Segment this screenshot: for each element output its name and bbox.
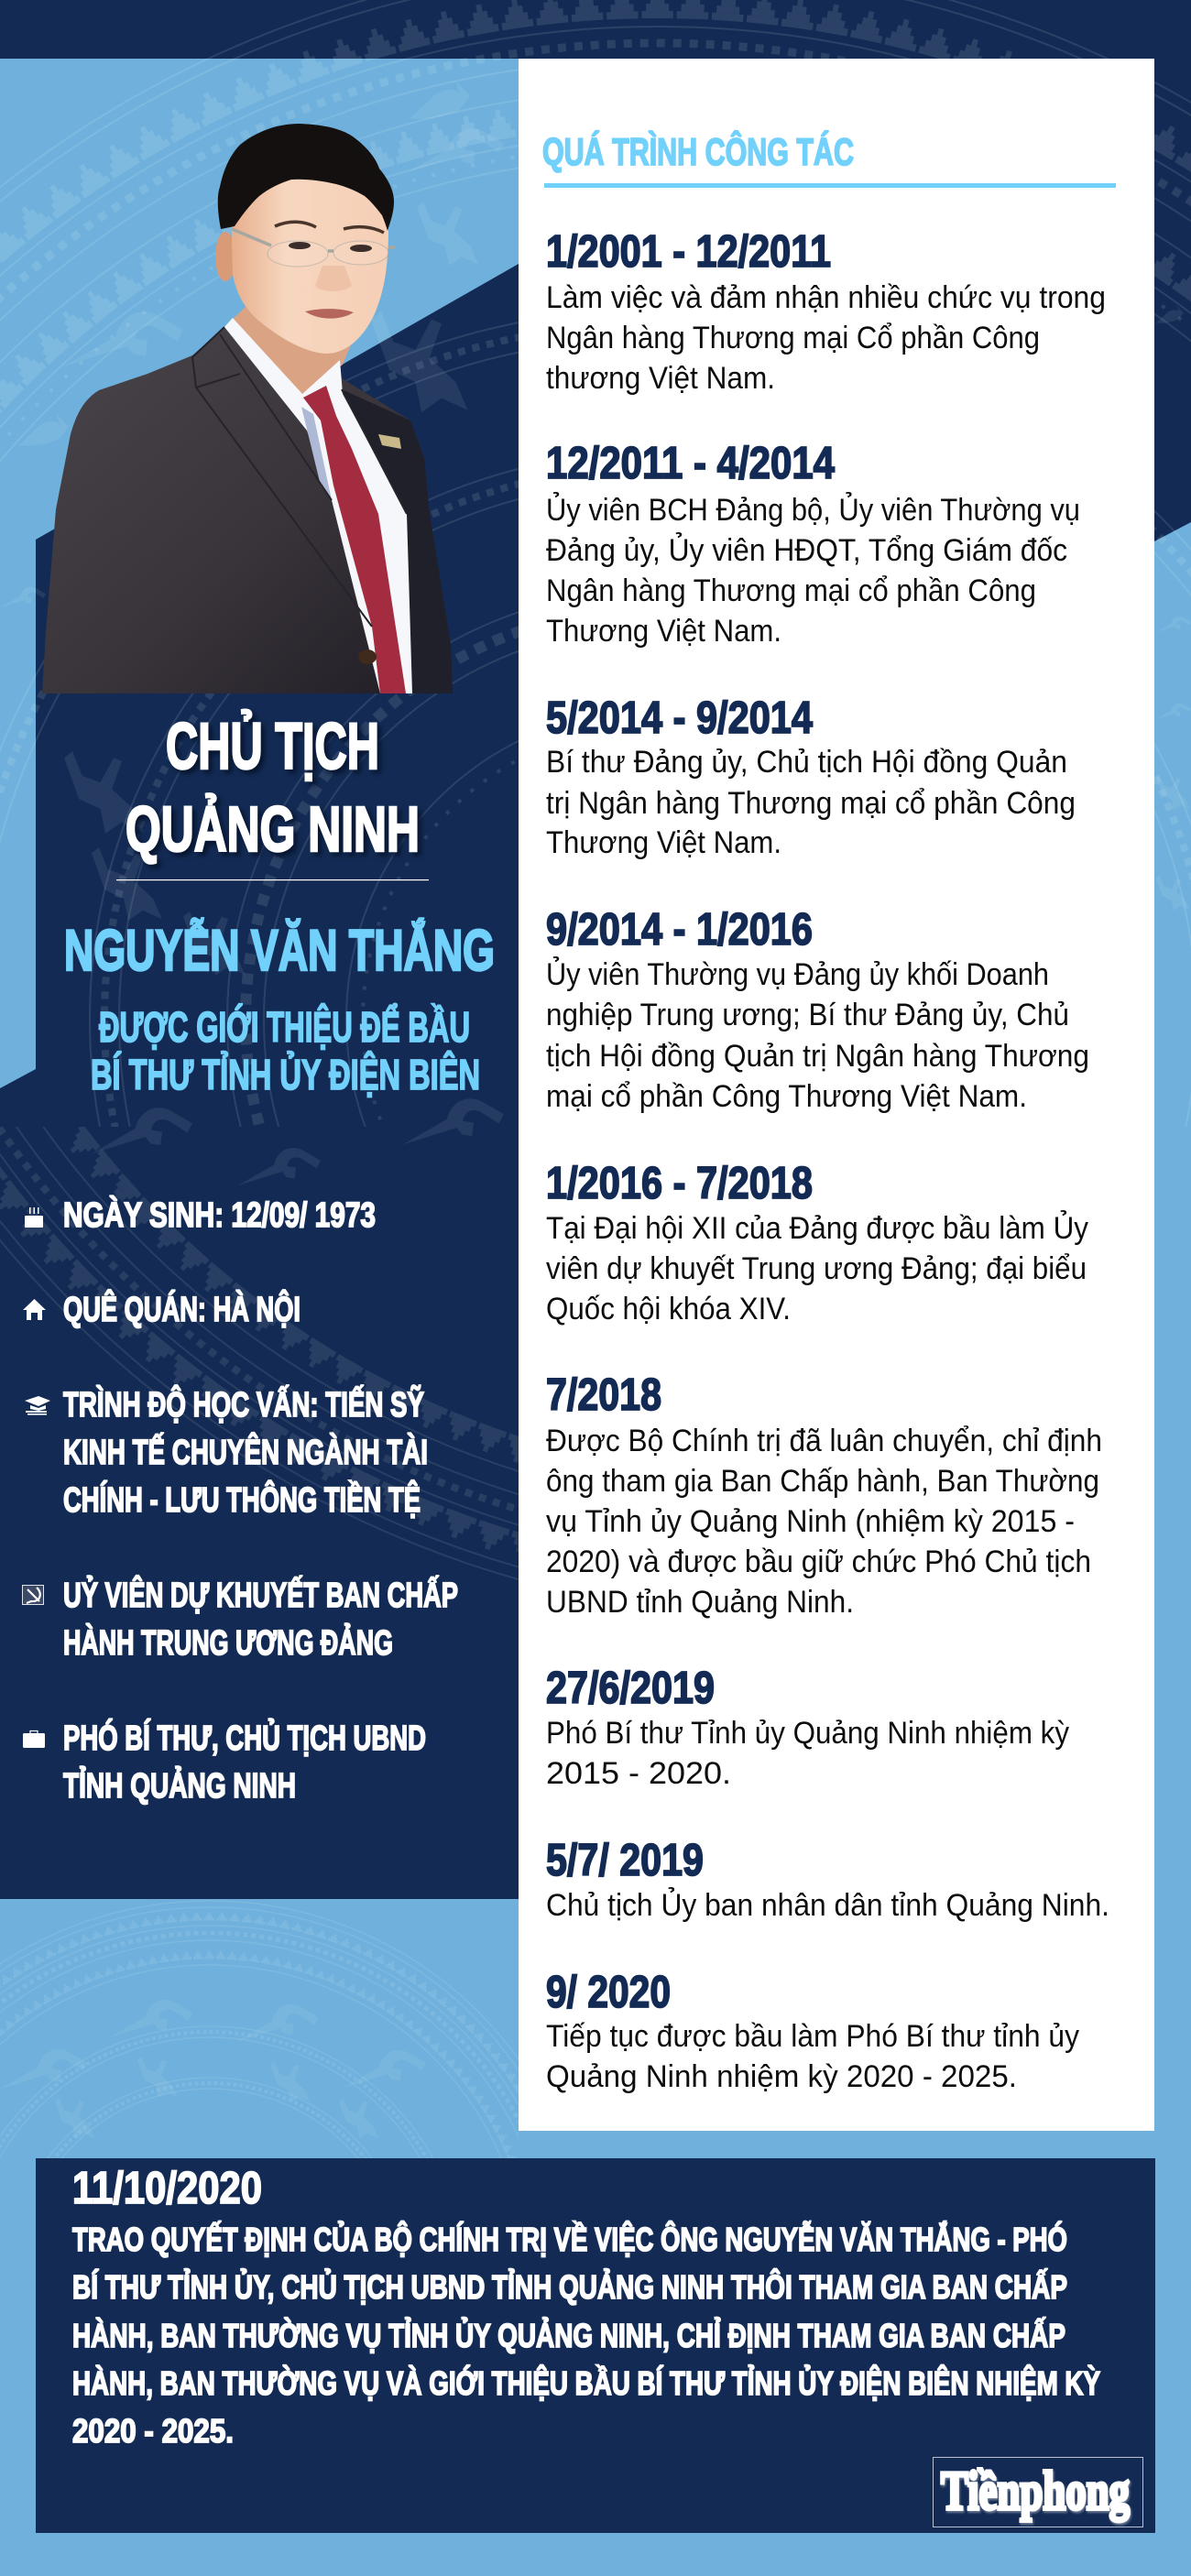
- name: NGUYỄN VĂN THẮNG: [64, 918, 495, 983]
- bottom panel: decision of 11/10/2020: 2020 - 2025.: [72, 2412, 234, 2450]
- career entry 5: viên dự khuyết Trung ương Đảng; đại biểu: [546, 1251, 1087, 1286]
- career entry 8: [546, 1836, 1109, 1923]
- drum pattern: light area bottom left: [0, 1900, 519, 2158]
- drum pattern: figures upper: [0, 81, 1191, 1185]
- career entry 9: 9/ 2020: [546, 1968, 671, 2017]
- career entry 1: [546, 227, 1106, 396]
- career entry 4: mại cổ phần Công Thương Việt Nam.: [546, 1079, 1027, 1114]
- career entry 2: [546, 439, 1080, 649]
- fact: education: KINH TẾ CHUYÊN NGÀNH TÀI: [63, 1432, 428, 1472]
- face: [231, 174, 388, 354]
- title block: QUẢNG NINH: [126, 793, 420, 865]
- fact: education: CHÍNH - LƯU THÔNG TIỀN TỆ: [63, 1479, 421, 1520]
- fact: birth date: [25, 1195, 376, 1235]
- career entry 3: Thương Việt Nam.: [546, 825, 781, 860]
- career entry 9: Tiếp tục được bầu làm Phó Bí thư tỉnh ủy: [546, 2019, 1079, 2054]
- title block: [126, 710, 420, 865]
- icon: briefcase: [23, 1731, 45, 1748]
- glasses: [232, 229, 395, 267]
- panel heading: career history: [542, 129, 1116, 188]
- career entry 4: 9/2014 - 1/2016: [546, 905, 813, 955]
- career entry 2: Đảng ủy, Ủy viên HĐQT, Tổng Giám đốc: [546, 533, 1067, 568]
- career entry 1: 1/2001 - 12/2011: [546, 227, 831, 277]
- career entry 7: [546, 1664, 1069, 1791]
- career entry 4: Ủy viên Thường vụ Đảng ủy khối Doanh: [546, 957, 1049, 992]
- career entry 3: 5/2014 - 9/2014: [546, 693, 813, 743]
- fact: party membership: HÀNH TRUNG ƯƠNG ĐẢNG: [63, 1622, 393, 1663]
- jacket right dark side: [342, 389, 453, 693]
- logo: Tiền phong: [933, 2457, 1143, 2527]
- icon: cake: [25, 1207, 43, 1228]
- icon: house: [23, 1299, 46, 1320]
- lapel pin: [378, 434, 401, 449]
- career entry 6: [546, 1370, 1102, 1620]
- nose: [315, 266, 352, 291]
- jacket button: [358, 649, 377, 664]
- career entry 7: 27/6/2019: [546, 1664, 715, 1713]
- panel heading: career history: QUÁ TRÌNH CÔNG TÁC: [542, 129, 854, 173]
- dark background shapes: [0, 0, 1191, 1899]
- career entry 7: 2015 - 2020.: [546, 1756, 731, 1791]
- fact: party membership: [22, 1575, 458, 1663]
- drum figures bottom left: [0, 2000, 426, 2139]
- career entry 2: Ủy viên BCH Đảng bộ, Ủy viên Thường vụ: [546, 493, 1080, 528]
- tie: [303, 386, 406, 693]
- suit jacket: [42, 327, 453, 693]
- career entry 7: Phó Bí thư Tỉnh ủy Quảng Ninh nhiệm kỳ: [546, 1716, 1069, 1751]
- career entry 6: 2020) và được bầu giữ chức Phó Chủ tịch: [546, 1545, 1091, 1579]
- career entry 6: vụ Tỉnh ủy Quảng Ninh (nhiệm kỳ 2015 -: [546, 1504, 1075, 1539]
- subtitle: BÍ THƯ TỈNH ỦY ĐIỆN BIÊN: [91, 1051, 480, 1098]
- career entry 6: 7/2018: [546, 1370, 661, 1420]
- hair: [218, 124, 394, 231]
- neck: [229, 307, 363, 396]
- career entry 5: Tại Đại hội XII của Đảng được bầu làm Ủy: [546, 1211, 1088, 1246]
- career entry 1: thương Việt Nam.: [546, 361, 775, 396]
- title block: CHỦ TỊCH: [166, 710, 379, 783]
- lapel lines: [192, 327, 407, 627]
- fact: party membership: UỶ VIÊN DỰ KHUYẾT BAN CHẤP: [63, 1575, 458, 1615]
- career entry 3: [546, 693, 1076, 860]
- career entry 3: trị Ngân hàng Thương mại cổ phần Công: [546, 786, 1076, 821]
- career entry 8: Chủ tịch Ủy ban nhân dân tỉnh Quảng Ninh.: [546, 1888, 1109, 1923]
- career entry 4: [546, 905, 1089, 1114]
- fact: education: TRÌNH ĐỘ HỌC VẤN: TIẾN SỸ: [63, 1383, 424, 1424]
- career entry 2: Thương Việt Nam.: [546, 614, 781, 649]
- career entry 5: Quốc hội khóa XIV.: [546, 1292, 791, 1326]
- drum pattern: upper: [0, 0, 1191, 1127]
- ear: [215, 232, 235, 281]
- career entry 2: 12/2011 - 4/2014: [546, 439, 835, 488]
- bottom panel: decision of 11/10/2020: [36, 2158, 1155, 2533]
- career entry 9: [546, 1968, 1079, 2094]
- shirt shadow: [301, 407, 332, 500]
- brows: [275, 222, 384, 233]
- career entry 8: 5/7/ 2019: [546, 1836, 704, 1885]
- fact: hometown: QUÊ QUÁN: HÀ NỘI: [63, 1288, 300, 1329]
- career entry 6: UBND tỉnh Quảng Ninh.: [546, 1585, 854, 1620]
- mouth: [305, 309, 354, 319]
- career entry 6: ông tham gia Ban Chấp hành, Ban Thường: [546, 1464, 1099, 1499]
- fact: birth date: NGÀY SINH: 12/09/ 1973: [63, 1195, 376, 1235]
- shirt: [224, 318, 412, 693]
- portrait of Nguyễn Văn Thắng: [42, 124, 453, 693]
- career entry 6: Được Bộ Chính trị đã luân chuyển, chỉ định: [546, 1424, 1102, 1458]
- career entry 4: tịch Hội đồng Quản trị Ngân hàng Thương: [546, 1039, 1089, 1074]
- bottom panel: decision of 11/10/2020: 11/10/2020: [72, 2164, 262, 2213]
- fact: current position: PHÓ BÍ THƯ, CHỦ TỊCH UBND: [63, 1718, 426, 1758]
- fact: current position: [23, 1718, 426, 1806]
- career entry 2: Ngân hàng Thương mại cổ phần Công: [546, 573, 1036, 608]
- title divider: [116, 879, 429, 880]
- career entry 1: Ngân hàng Thương mại Cổ phần Công: [546, 321, 1040, 355]
- fact: education: [25, 1383, 428, 1520]
- career entry 5: [546, 1159, 1088, 1326]
- eyes: [289, 242, 372, 252]
- drum pattern: lower left of dark panel: [0, 1127, 519, 1580]
- career entry 4: nghiệp Trung ương; Bí thư Đảng ủy, Chủ: [546, 998, 1069, 1032]
- icon: hammer and sickle flag: [22, 1585, 44, 1605]
- white career panel: [519, 59, 1154, 2131]
- subtitle: ĐƯỢC GIỚI THIỆU ĐỂ BẦU: [99, 1003, 470, 1051]
- career entry 9: Quảng Ninh nhiệm kỳ 2020 - 2025.: [546, 2059, 1017, 2094]
- career entry 3: Bí thư Đảng ủy, Chủ tịch Hội đồng Quản: [546, 745, 1067, 780]
- subtitle: [91, 1003, 480, 1098]
- career entry 5: 1/2016 - 7/2018: [546, 1159, 813, 1208]
- fact: current position: TỈNH QUẢNG NINH: [63, 1765, 296, 1806]
- icon: graduation cap: [25, 1396, 50, 1415]
- logo: Tiền phong: Tiềnphong: [941, 2461, 1130, 2521]
- career entry 1: Làm việc và đảm nhận nhiều chức vụ trong: [546, 280, 1106, 315]
- fact: hometown: [23, 1288, 300, 1329]
